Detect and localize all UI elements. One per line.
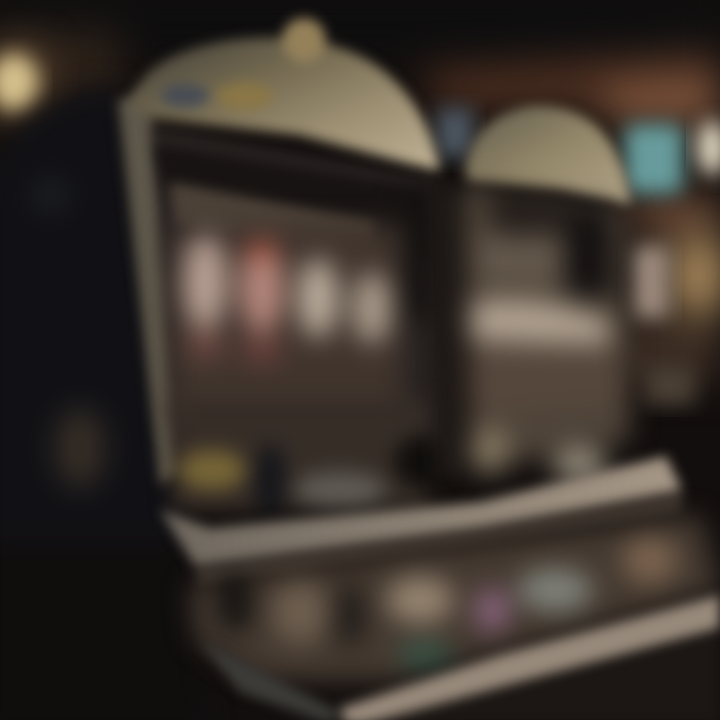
right machine dome	[465, 106, 630, 205]
background lights	[0, 42, 720, 405]
left machine window top	[155, 145, 430, 268]
centre pillar	[428, 178, 468, 490]
right machine body	[462, 184, 630, 483]
left machine frame	[118, 92, 455, 485]
lower compartment	[190, 515, 720, 680]
upper shelf	[160, 456, 684, 585]
left machine side panel	[0, 85, 210, 720]
left machine lower panel	[172, 400, 446, 516]
left machine dome	[130, 18, 440, 172]
left machine reels	[170, 190, 432, 425]
lower shelf	[200, 595, 720, 720]
